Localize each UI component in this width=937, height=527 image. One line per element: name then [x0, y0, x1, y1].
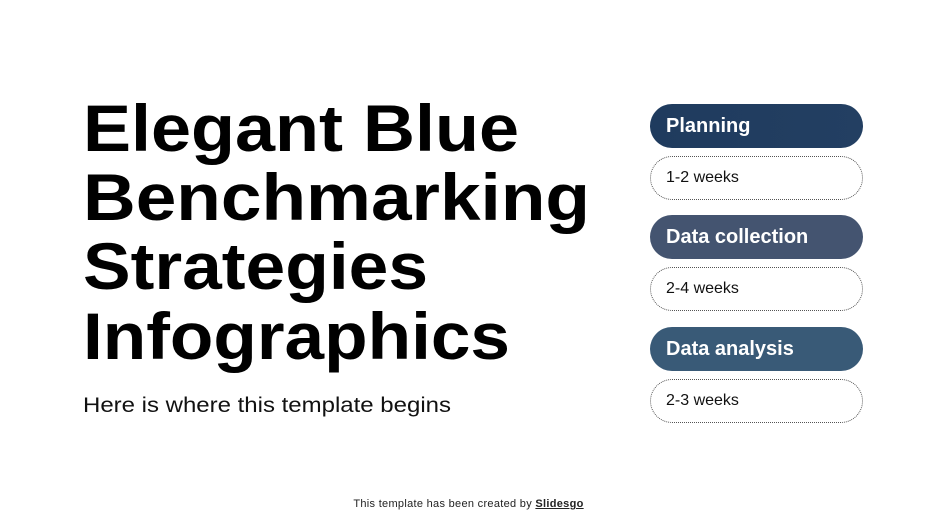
- title: [83, 91, 590, 373]
- subtitle: Here is where this template begins: [83, 394, 451, 417]
- footer: This template has been created by Slidesgo: [353, 498, 584, 510]
- box: planning duration: 1-2 weeks: [666, 169, 739, 186]
- box: data analysis duration: 2-3 weeks: [666, 392, 739, 409]
- pill: data collection: [650, 215, 863, 259]
- pill: data analysis: [650, 327, 863, 371]
- box: planning duration: [650, 156, 863, 200]
- pill: planning: [650, 104, 863, 148]
- box: data collection duration: [650, 267, 863, 311]
- title: Infographics: [83, 299, 510, 373]
- pill: planning: Planning: [666, 115, 750, 137]
- box: data analysis duration: [650, 379, 863, 423]
- title: Benchmarking: [83, 160, 590, 234]
- title: Strategies: [83, 229, 428, 303]
- pill: data analysis: Data analysis: [666, 338, 794, 360]
- box: data collection duration: 2-4 weeks: [666, 280, 739, 297]
- pill: data collection: Data collection: [666, 226, 808, 248]
- title: Elegant Blue: [83, 91, 519, 165]
